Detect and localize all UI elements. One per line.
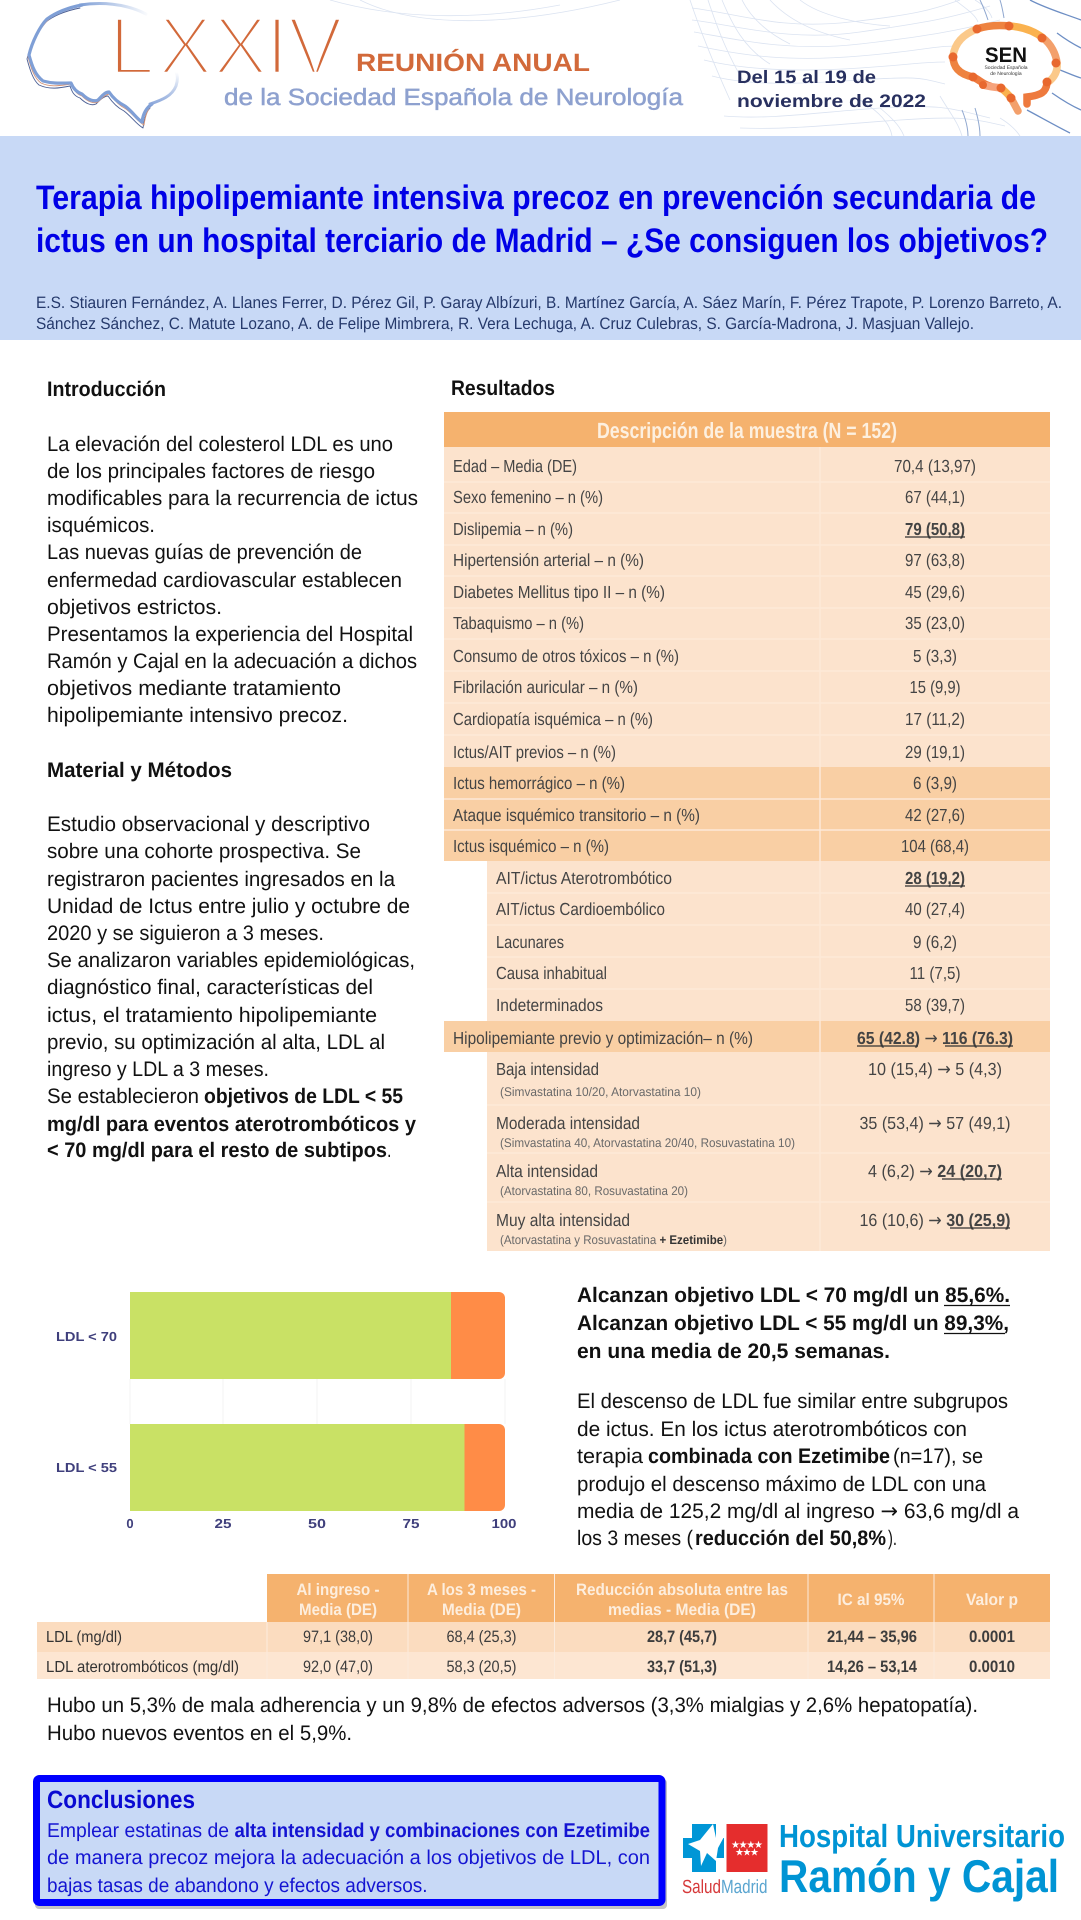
icon: SEN logo: de Neurología [990, 71, 1022, 77]
row: causa inhabitual: Causa inhabitual [496, 963, 607, 983]
row: hipertension: 97 (63,8) [905, 550, 965, 570]
row: diabetes: 45 (29,6) [905, 582, 965, 602]
text block: introduccion: Presentamos la experiencia del Hospital [47, 623, 413, 646]
text block: material y metodos: mg/dl para eventos aterotrombóticos y [47, 1113, 416, 1136]
table header: Al ingreso - [296, 1581, 380, 1599]
row: causa inhabitual: 11 (7,5) [910, 963, 960, 983]
row: cardiopatia [453, 709, 965, 729]
icon: SEN logo [948, 22, 1060, 111]
icon: SEN logo: SEN [985, 44, 1027, 67]
text block: objectives reached: Alcanzan objetivo LDL < 70 mg/dl un 85,6%. [577, 1284, 1010, 1307]
panel: conclusions [35, 1778, 667, 1909]
row: diabetes: Diabetes Mellitus tipo II – n (%) [453, 582, 665, 602]
text block: introduccion: isquémicos. [47, 514, 155, 537]
dates: noviembre de 2022 [737, 91, 926, 111]
row: edad: 70,4 (13,97) [894, 456, 976, 476]
row: isquemico: Ictus isquémico – n (%) [453, 836, 609, 856]
row: alta intensidad: Alta intensidad [496, 1161, 598, 1181]
row: baja intensidad [496, 1059, 1002, 1099]
table: descripcion de la muestra [444, 412, 1050, 1251]
row: AIT: Ataque isquémico transitorio – n (%) [453, 805, 700, 825]
text block: introduccion: La elevación del colesterol LDL es uno [47, 433, 393, 456]
table title: Descripción de la muestra (N = 152) [597, 418, 897, 443]
row: hipertension: Hipertensión arterial – n (%) [453, 550, 644, 570]
row: muy alta intensidad [496, 1210, 1010, 1247]
row: baja intensidad: Baja intensidad [496, 1059, 599, 1079]
row: causa inhabitual [496, 963, 960, 983]
table header: Media (DE) [442, 1601, 521, 1619]
LXXIV numeral: LXXIV [109, 1, 343, 92]
bar: LDL < 55 [56, 1424, 505, 1511]
table header: A los 3 meses - [427, 1581, 536, 1599]
text block: material y metodos: diagnóstico final, características del [47, 976, 373, 999]
row: hipolipemiante previo: 65 (42.8) → 116 (76.3) [857, 1028, 1013, 1049]
row: sexo femenino [453, 487, 965, 507]
conclusions text: alta intensidad y combinaciones con Ezetimibe [234, 1820, 650, 1842]
text block: introduccion: objetivos estrictos. [47, 596, 222, 619]
text block: material y metodos: < 70 mg/dl para el resto de subtipos [47, 1139, 387, 1162]
row: dislipemia: 79 (50,8) [905, 519, 965, 539]
dates: Del 15 al 19 de [737, 67, 876, 87]
row: alta intensidad: (Atorvastatina 80, Rosuvastatina 20) [500, 1184, 688, 1198]
row: edad: Edad – Media (DE) [453, 456, 577, 476]
row: tabaquismo [453, 613, 965, 633]
logo: Hospital Ramon y Cajal [682, 1818, 1065, 1902]
row: edad [453, 456, 976, 476]
text block: LDL reduction: los 3 meses ( [577, 1527, 693, 1550]
x axis labels: 50 [308, 1516, 326, 1531]
row: toxicos [453, 646, 957, 666]
row: LDL: LDL (mg/dl) [46, 1629, 122, 1646]
row: sexo femenino: Sexo femenino – n (%) [453, 487, 603, 507]
text block: material y metodos: Unidad de Ictus entre julio y octubre de [47, 895, 410, 918]
dates [737, 67, 926, 111]
row: aterotrombotico [496, 868, 965, 888]
row: previos: 29 (19,1) [905, 742, 965, 762]
row: hemorragico: Ictus hemorrágico – n (%) [453, 773, 625, 793]
table: LDL reduction [37, 1574, 1050, 1679]
text block: adherence [47, 1694, 978, 1745]
text block: LDL reduction: produjo el descenso máximo de LDL con una [577, 1473, 986, 1496]
conclusions heading: Conclusiones [47, 1786, 195, 1814]
table header: IC al 95% [838, 1591, 905, 1609]
text block: objectives reached [577, 1284, 1010, 1363]
row: cardiopatia: 17 (11,2) [905, 709, 965, 729]
row: hipolipemiante previo [453, 1028, 1013, 1049]
stacked bar chart: LDL objectives [56, 1292, 516, 1531]
row: dislipemia: Dislipemia – n (%) [453, 519, 573, 539]
x axis labels: 75 [402, 1516, 420, 1531]
bar: LDL < 70 [56, 1292, 505, 1379]
icon: Madrid flag: ★★★ [735, 1848, 759, 1858]
row: cardioembolico [496, 899, 965, 919]
text block: LDL reduction: de ictus. En los ictus aterotrombóticos con [577, 1418, 967, 1441]
row: tabaquismo: 35 (23,0) [905, 613, 965, 633]
row: indeterminados: 58 (39,7) [905, 995, 965, 1015]
row: diabetes [453, 582, 965, 602]
text block: material y metodos: sobre una cohorte prospectiva. Se [47, 840, 361, 863]
row: indeterminados [496, 995, 965, 1015]
x axis labels: 25 [214, 1516, 232, 1531]
table header: Media (DE) [299, 1601, 377, 1619]
row: hemorragico [453, 773, 957, 793]
row: cardiopatia: Cardiopatía isquémica – n (%) [453, 709, 653, 729]
row: cardioembolico: 40 (27,4) [905, 899, 965, 919]
row: LDL aterotromboticos: 33,7 (51,3) [647, 1658, 717, 1676]
row: lacunares [496, 932, 957, 952]
text block: introduccion [47, 433, 418, 727]
row: baja intensidad: (Simvastatina 10/20, Atorvastatina 10) [500, 1085, 701, 1099]
row: AIT: 42 (27,6) [905, 805, 965, 825]
text block: material y metodos: Se establecieron [47, 1085, 199, 1108]
row: dislipemia [453, 519, 965, 539]
row: alta intensidad: 4 (6,2) → 24 (20,7) [868, 1161, 1002, 1182]
row: LDL aterotromboticos: 0.0010 [969, 1658, 1015, 1676]
conclusions text [47, 1820, 650, 1897]
text block: introduccion: Ramón y Cajal en la adecuación a dichos [47, 650, 417, 673]
text block: LDL reduction: El descenso de LDL fue similar entre subgrupos [577, 1390, 1008, 1413]
row: AIT [453, 805, 965, 825]
row: cardioembolico: AIT/ictus Cardioembólico [496, 899, 665, 919]
heading: material y metodos: Material y Métodos [47, 759, 232, 782]
icon: brain outline [27, 4, 178, 128]
row: lacunares: 9 (6,2) [913, 932, 957, 952]
text block: introduccion: objetivos mediante tratamiento [47, 677, 341, 700]
x axis labels: 0 [126, 1516, 134, 1531]
row: LDL: 21,44 – 35,96 [827, 1628, 917, 1646]
row: muy alta intensidad: (Atorvastatina y Rosuvastatina + Ezetimibe) [500, 1233, 727, 1247]
title [36, 179, 1048, 260]
row: toxicos: 5 (3,3) [913, 646, 957, 666]
text block: objectives reached: en una media de 20,5 semanas. [577, 1340, 890, 1363]
text block: material y metodos: 2020 y se siguieron a 3 meses. [47, 922, 324, 945]
text block: objectives reached: Alcanzan objetivo LDL < 55 mg/dl un 89,3%, [577, 1312, 1009, 1335]
text block: material y metodos: objetivos de LDL < 55 [204, 1085, 403, 1108]
row: muy alta intensidad: Muy alta intensidad [496, 1210, 630, 1230]
row: isquemico: 104 (68,4) [901, 836, 969, 856]
row: alta intensidad [496, 1161, 1002, 1198]
text block: material y metodos: previo, su optimización al alta, LDL al [47, 1031, 385, 1054]
row: previos [453, 742, 965, 762]
text block: material y metodos: registraron pacientes ingresados en la [47, 868, 395, 891]
text block: introduccion: Las nuevas guías de prevención de [47, 541, 362, 564]
row: LDL [46, 1628, 1015, 1646]
text block: LDL reduction: reducción del 50,8% [695, 1527, 886, 1550]
row: LDL aterotromboticos: 58,3 (20,5) [446, 1658, 516, 1676]
row: tabaquismo: Tabaquismo – n (%) [453, 613, 584, 633]
text block: LDL reduction [577, 1390, 1019, 1550]
text block: material y metodos: ictus, el tratamiento hipolipemiante [47, 1004, 377, 1027]
conclusions text: de manera precoz mejora la adecuación a los objetivos de LDL, con [47, 1847, 650, 1869]
row: toxicos: Consumo de otros tóxicos – n (%) [453, 646, 679, 666]
row: hipertension [453, 550, 965, 570]
row: LDL aterotromboticos: 14,26 – 53,14 [827, 1658, 918, 1676]
authors [36, 294, 1062, 333]
row: moderada intensidad: Moderada intensidad [496, 1113, 640, 1133]
row: moderada intensidad: (Simvastatina 40, Atorvastatina 20/40, Rosuvastatina 10) [500, 1136, 795, 1150]
text block: introduccion: de los principales factores de riesgo [47, 460, 375, 483]
text block: adherence: Hubo nuevos eventos en el 5,9%. [47, 1722, 352, 1745]
row: LDL: 0.0001 [969, 1628, 1015, 1646]
heading: resultados: Resultados [451, 377, 555, 400]
text block: LDL reduction: media de 125,2 mg/dl al ingreso → 63,6 mg/dl a [577, 1499, 1019, 1523]
table header: Reducción absoluta entre las [576, 1581, 788, 1599]
text block: introduccion: modificables para la recurrencia de ictus [47, 487, 418, 510]
row: LDL: 68,4 (25,3) [446, 1628, 516, 1646]
table header: medias - Media (DE) [608, 1601, 756, 1619]
text block: LDL reduction: ). [888, 1527, 897, 1550]
row: muy alta intensidad: 16 (10,6) → 30 (25,9) [860, 1210, 1010, 1231]
row: LDL aterotromboticos: 92,0 (47,0) [303, 1658, 373, 1676]
row: previos: Ictus/AIT previos – n (%) [453, 742, 616, 762]
heading: introduccion: Introducción [47, 378, 166, 401]
row: hemorragico: 6 (3,9) [913, 773, 957, 793]
text block: material y metodos: ingreso y LDL a 3 meses. [47, 1058, 269, 1081]
text block: material y metodos: . [387, 1139, 392, 1162]
table header [296, 1581, 1018, 1619]
text block: material y metodos [47, 813, 416, 1162]
text block: adherence: Hubo un 5,3% de mala adherencia y un 9,8% de efectos adversos (3,3% mialgias y 2,6% hepatopatía). [47, 1694, 978, 1717]
x axis labels: 100 [492, 1516, 516, 1531]
bar: LDL < 70: LDL < 70 [56, 1329, 117, 1344]
row: LDL: 97,1 (38,0) [303, 1628, 373, 1646]
row: lacunares: Lacunares [496, 932, 564, 952]
header banner [27, 0, 1081, 136]
icon: Madrid flag: ★★★★ [731, 1840, 763, 1851]
icon: SEN logo: Sociedad Española [984, 65, 1028, 71]
row: fibrilacion: Fibrilación auricular – n (%) [453, 677, 638, 697]
conclusions text: Emplear estatinas de [47, 1820, 229, 1842]
row: aterotrombotico: AIT/ictus Aterotrombótico [496, 868, 672, 888]
row: fibrilacion [453, 677, 960, 697]
icon: SaludMadrid cross [683, 1824, 725, 1872]
row: LDL aterotromboticos [46, 1658, 1015, 1676]
conclusions text: bajas tasas de abandono y efectos adversos. [47, 1875, 428, 1897]
text block: introduccion: hipolipemiante intensivo precoz. [47, 704, 348, 727]
salud madrid: SaludMadrid [682, 1877, 768, 1898]
bar: LDL < 55: LDL < 55 [56, 1460, 117, 1475]
text block: LDL reduction: (n=17), se [893, 1445, 983, 1468]
row: moderada intensidad: 35 (53,4) → 57 (49,1) [860, 1113, 1010, 1134]
text block: material y metodos: Estudio observacional y descriptivo [47, 813, 370, 836]
row: aterotrombotico: 28 (19,2) [905, 868, 965, 888]
society name: de la Sociedad Española de Neurología [224, 84, 684, 110]
row: indeterminados: Indeterminados [496, 995, 603, 1015]
panel: title band [0, 136, 1081, 340]
row: LDL: 28,7 (45,7) [647, 1628, 717, 1646]
authors: Sánchez Sánchez, C. Matute Lozano, A. de Felipe Mimbrera, R. Vera Lechuga, A. Cruz Culebras, S. García-Madrona, J. Masjuan Vallejo. [36, 315, 974, 333]
row: fibrilacion: 15 (9,9) [910, 677, 960, 697]
text block: LDL reduction: combinada con Ezetimibe [648, 1445, 890, 1468]
text block: LDL reduction: terapia [577, 1445, 643, 1468]
table header: Valor p [966, 1591, 1018, 1609]
row: isquemico [453, 836, 969, 856]
x axis labels [126, 1516, 516, 1531]
row: hipolipemiante previo: Hipolipemiante previo y optimización– n (%) [453, 1028, 753, 1048]
row: LDL aterotromboticos: LDL aterotrombóticos (mg/dl) [46, 1659, 239, 1676]
row: baja intensidad: 10 (15,4) → 5 (4,3) [868, 1059, 1002, 1080]
icon: Madrid flag [726, 1824, 768, 1872]
row: sexo femenino: 67 (44,1) [905, 487, 965, 507]
reunion anual: REUNIÓN ANUAL [356, 48, 590, 77]
text block: introduccion: enfermedad cardiovascular establecen [47, 569, 402, 592]
text block: material y metodos: Se analizaron variables epidemiológicas, [47, 949, 415, 972]
row: moderada intensidad [496, 1113, 1010, 1150]
